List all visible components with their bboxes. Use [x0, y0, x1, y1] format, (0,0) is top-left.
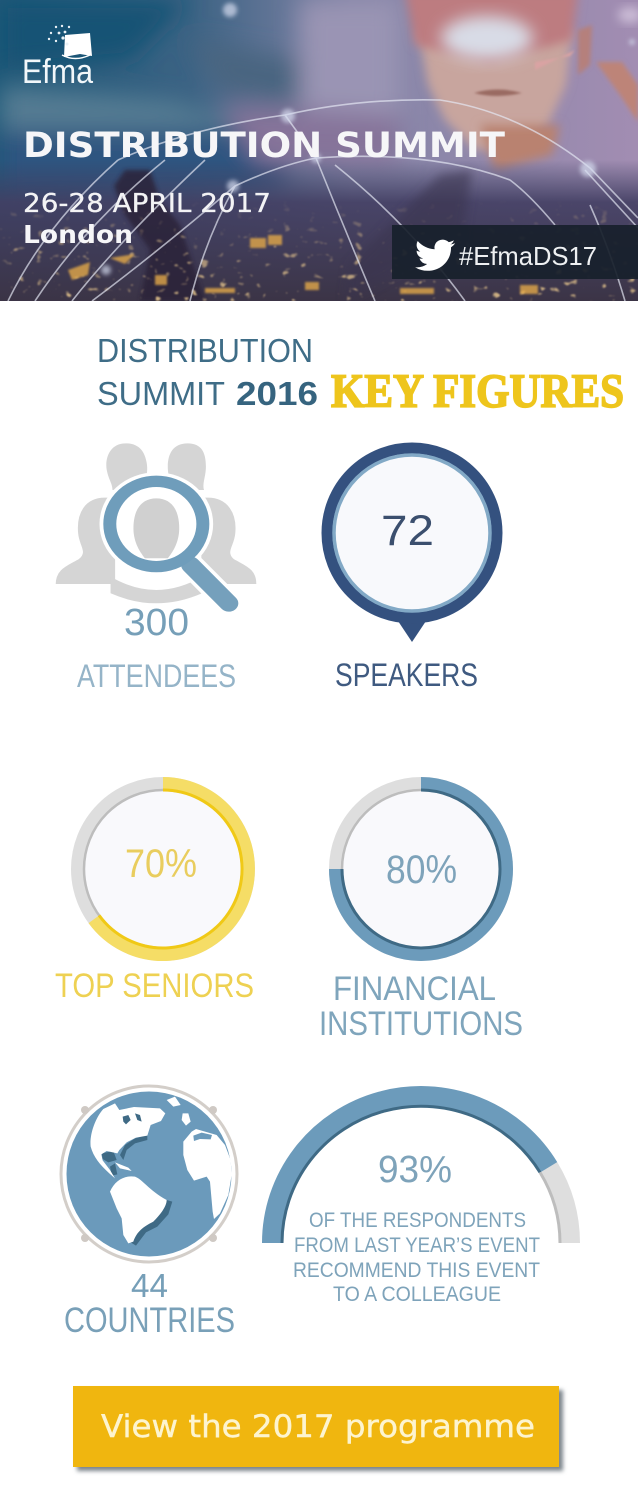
attendees number: 300	[124, 602, 189, 644]
speakers label: SPEAKERS	[335, 657, 478, 693]
twitter hashtag bar	[392, 225, 638, 279]
heading line 1: DISTRIBUTION	[97, 332, 313, 369]
icon: globe	[61, 1086, 237, 1262]
africa and europe	[183, 1129, 232, 1219]
label: INSTITUTIONS	[319, 1005, 523, 1043]
percentage: 80%	[386, 848, 457, 892]
countries label: COUNTRIES	[64, 1301, 235, 1340]
label: TOP SENIORS	[55, 967, 254, 1005]
network lines	[8, 100, 638, 301]
attendees stat	[54, 443, 257, 694]
coast shadows	[102, 1135, 172, 1246]
heading year: 2016	[236, 375, 318, 412]
north america	[90, 1103, 165, 1178]
chart: 70 percent ring	[78, 784, 248, 955]
speakers stat	[327, 448, 497, 693]
speakers number: 72	[381, 507, 434, 555]
description: RECOMMEND THIS EVENT	[293, 1259, 540, 1282]
south america	[110, 1176, 167, 1243]
event date: 26-28 APRIL 2017	[23, 189, 271, 219]
top seniors stat	[55, 784, 254, 1005]
countries stat	[61, 1086, 237, 1340]
button label: View the 2017 programme	[101, 1409, 535, 1445]
section heading	[97, 332, 624, 418]
network nodes	[101, 3, 635, 275]
hashtag: #EfmaDS17	[459, 241, 597, 271]
description: OF THE RESPONDENTS	[309, 1209, 526, 1232]
attendees label: ATTENDEES	[77, 658, 236, 694]
description	[293, 1209, 540, 1306]
chart: 80 percent ring	[336, 784, 506, 954]
header banner	[0, 0, 638, 301]
countries number: 44	[131, 1267, 168, 1304]
logo wordmark: Efma	[22, 53, 93, 91]
recommendation stat	[272, 1096, 570, 1306]
financial institutions stat	[319, 784, 523, 1043]
logo mark	[48, 25, 92, 58]
label: FINANCIAL	[333, 970, 496, 1008]
description: FROM LAST YEAR’S EVENT	[294, 1234, 540, 1257]
left hand silhouette	[114, 170, 205, 301]
call to action button	[73, 1386, 563, 1471]
icon: people and magnifier	[54, 443, 257, 603]
icon: twitter bird	[415, 240, 455, 271]
city lights	[0, 200, 638, 301]
description: TO A COLLEAGUE	[333, 1283, 501, 1306]
event title: DISTRIBUTION SUMMIT	[23, 126, 505, 166]
label	[319, 970, 523, 1043]
event location: London	[23, 220, 133, 249]
percentage: 93%	[378, 1149, 452, 1191]
chart: 93 percent arc	[272, 1096, 570, 1243]
logo	[22, 25, 93, 91]
percentage: 70%	[125, 842, 197, 886]
heading line 2: SUMMIT	[97, 375, 225, 412]
face	[405, 0, 638, 170]
icon: map pin badge	[327, 448, 497, 642]
